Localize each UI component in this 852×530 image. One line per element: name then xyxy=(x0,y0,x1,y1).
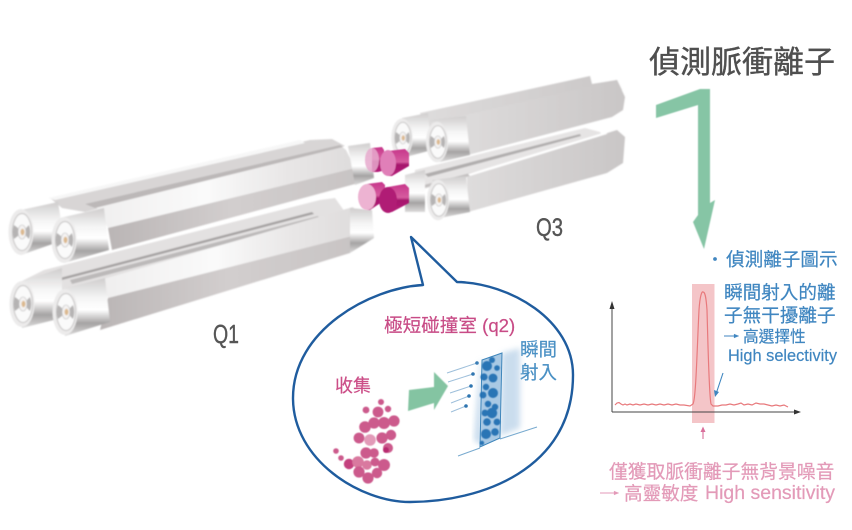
blue ion packet xyxy=(458,348,537,456)
arrow: green bent arrow down xyxy=(656,89,715,249)
signal trace xyxy=(615,292,788,407)
text block: high selectivity xyxy=(724,282,837,365)
label: instantaneous injection xyxy=(520,339,557,383)
text block: high sensitivity: High sensitivity xyxy=(705,482,835,504)
text block: high sensitivity: 僅獲取脈衝離子無背景噪音 xyxy=(609,461,834,482)
label: Q1: Q1 xyxy=(213,319,239,349)
Q1 bottom front rod xyxy=(52,207,374,336)
label: instantaneous injection: 瞬間 xyxy=(520,339,557,360)
q2 collision cell magenta rods xyxy=(358,147,409,213)
callout: collision cell speech bubble xyxy=(293,237,573,502)
Q1 quadrupole rods xyxy=(8,76,625,336)
text block: high sensitivity xyxy=(600,461,835,504)
magenta upper front rod xyxy=(380,149,409,176)
Q3 back bottom rod xyxy=(405,128,605,212)
blue ion streams xyxy=(447,361,479,412)
bubble outline xyxy=(293,237,573,502)
label: detected ion chart: 偵測離子圖示 xyxy=(726,249,838,270)
text block: high selectivity: 子無干擾離子 xyxy=(724,305,836,326)
pink ion cluster xyxy=(333,399,400,484)
title: 偵測脈衝離子 xyxy=(649,45,835,80)
text block: high selectivity: 瞬間射入的離 xyxy=(724,282,836,303)
arrow: green block arrow xyxy=(408,372,448,411)
label: collect: 收集 xyxy=(335,376,371,396)
label: instantaneous injection: 射入 xyxy=(520,362,557,383)
magenta lower front rod xyxy=(379,184,409,213)
text block: high selectivity: 高選擇性 xyxy=(743,328,806,346)
label: Q3: Q3 xyxy=(536,214,563,242)
Q1 top front rod xyxy=(52,143,374,263)
heading: collision chamber: 極短碰撞室 (q2) xyxy=(384,315,515,336)
arrow: pink pointer to band xyxy=(700,426,706,439)
text block: high selectivity: High selectivity xyxy=(728,346,837,365)
Q3 back top rod xyxy=(391,76,622,158)
arrow: blue pointer to peak xyxy=(714,373,723,397)
chart: ion peak xyxy=(610,284,801,439)
Q3 top front rod xyxy=(426,80,625,162)
highlighted band xyxy=(692,284,714,423)
Q1 top back rod xyxy=(8,139,345,255)
magenta lower back rod xyxy=(358,182,385,210)
magenta upper back rod xyxy=(365,147,386,172)
text block: high sensitivity: 高靈敏度 xyxy=(624,483,698,504)
Q1 bottom back rod xyxy=(10,198,345,328)
Q3 bottom front rod xyxy=(427,130,625,220)
axes xyxy=(610,301,801,414)
